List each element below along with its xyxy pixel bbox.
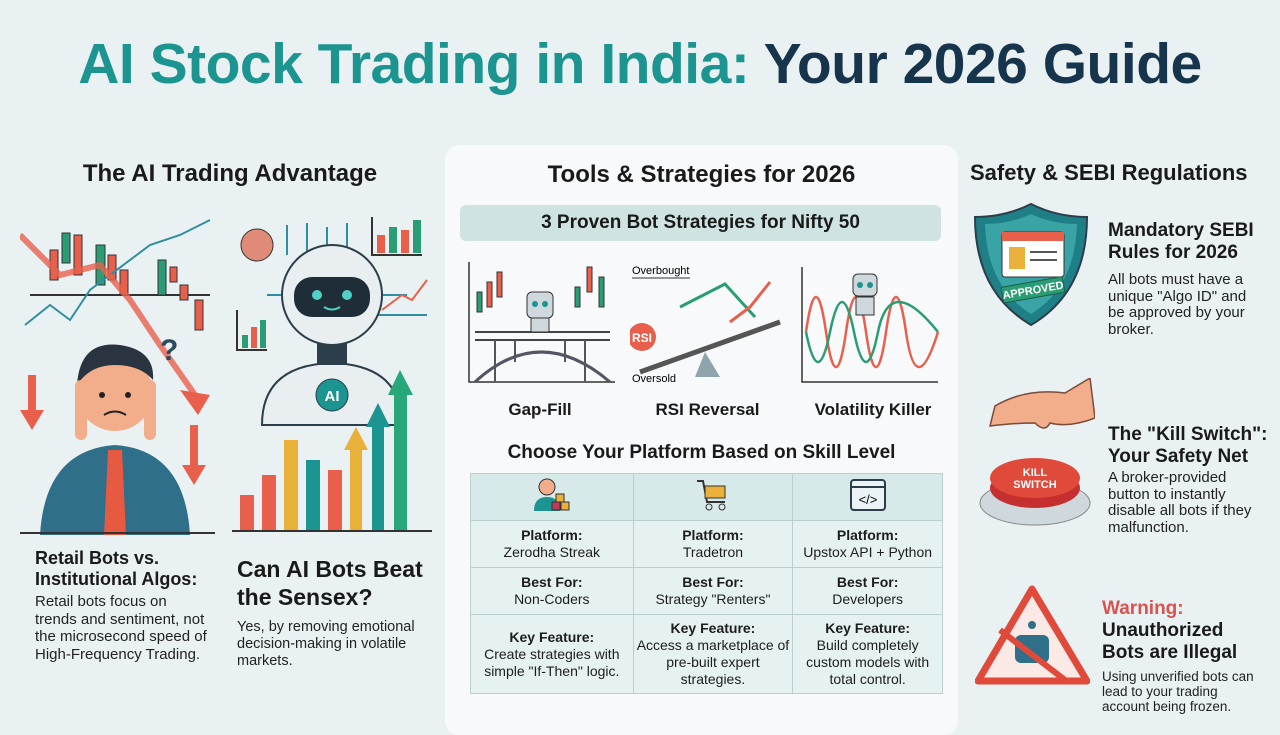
panel: tools & strategies: [445, 145, 958, 735]
panel: AI trading advantage: [20, 160, 432, 669]
text: retail bots: Retail Bots vs. Institutional Algos:: [35, 548, 197, 589]
illustration: stressed trader: [20, 219, 215, 535]
illustration: AI robot with rising bars: [232, 217, 432, 532]
strategy: RSI reversal: [630, 265, 781, 419]
strategy: volatility killer: [801, 267, 940, 419]
text: retail bots: Retail bots focus on trends and sentiment, not the microsecond speed of High-Frequency Trading.: [35, 593, 207, 662]
icon: shield approved: [974, 202, 1088, 326]
strategy: RSI reversal: Overbought: [632, 265, 689, 277]
strategy: gap-fill: [468, 262, 615, 419]
illustration: stressed trader: ?: [160, 334, 178, 367]
icon: code window: [850, 479, 886, 511]
icon: kill switch: [980, 378, 1095, 526]
table: platforms: Platform:: [837, 527, 898, 543]
icon: kill switch: SWITCH: [1013, 479, 1057, 491]
table: platforms: Best For:: [837, 574, 898, 590]
illustration: AI robot with rising bars: AI: [324, 388, 340, 405]
icon: code window: </>: [858, 492, 877, 507]
strategy: RSI reversal: RSI Reversal: [656, 400, 759, 419]
text: SEBI rules: Mandatory SEBI Rules for 2026: [1108, 220, 1254, 263]
table: platforms: Build completely custom models with total control.: [806, 637, 929, 687]
table: platforms: Best For:: [682, 574, 744, 590]
text: kill switch: A broker-provided button to instantly disable all bots if they malfunction.: [1108, 469, 1251, 536]
text: kill switch: The "Kill Switch": Your Safety Net: [1108, 424, 1267, 467]
banner: 3 strategies: 3 Proven Bot Strategies for Nifty 50: [541, 212, 860, 233]
table: platforms: Zerodha Streak: [504, 544, 600, 560]
table: platforms: Tradetron: [683, 544, 743, 560]
table: platforms: Create strategies with simple "If-Then" logic.: [484, 646, 620, 678]
text: warning: [1102, 598, 1254, 714]
table: platforms: Key Feature:: [825, 620, 910, 636]
strategy: RSI reversal: Oversold: [632, 373, 676, 385]
text: retail bots: [35, 548, 207, 662]
heading: tools: Tools & Strategies for 2026: [548, 161, 855, 188]
heading: advantage: The AI Trading Advantage: [83, 160, 377, 187]
banner: 3 strategies: [460, 205, 941, 241]
text: warning: Warning:: [1102, 598, 1184, 619]
text: warning: Using unverified bots can lead to your trading account being frozen.: [1102, 669, 1254, 714]
text: beat sensex: Can AI Bots Beat the Sensex?: [237, 556, 423, 610]
heading: choose platform: Choose Your Platform Based on Skill Level: [508, 442, 895, 463]
table: platforms: Access a marketplace of pre-built expert strategies.: [637, 637, 789, 687]
strategy: volatility killer: Volatility Killer: [815, 400, 931, 419]
table: platforms: Best For:: [521, 574, 583, 590]
text: SEBI rules: All bots must have a unique "Algo ID" and be approved by your broker.: [1108, 271, 1246, 338]
icon: shield approved: APPROVED: [1002, 280, 1065, 302]
text: warning: Unauthorized Bots are Illegal: [1102, 620, 1237, 663]
table: platforms: Strategy "Renters": [655, 591, 770, 607]
icon: kill switch: KILL: [1023, 467, 1047, 479]
text: SEBI rules: [1108, 220, 1254, 338]
table: platforms: Upstox API + Python: [803, 544, 932, 560]
table: platforms: Platform:: [682, 527, 744, 543]
icon: user: [534, 478, 570, 511]
title: AI Stock Trading in India: Your 2026 Guide: [78, 32, 1202, 96]
strategy: gap-fill: Gap-Fill: [508, 400, 572, 419]
table: platforms: Key Feature:: [509, 628, 594, 644]
panel: safety & SEBI: [970, 160, 1267, 714]
icon: warning no-bot: [975, 586, 1090, 684]
text: beat sensex: [237, 556, 423, 669]
strategy: RSI reversal: RSI: [632, 331, 652, 345]
table: platforms: Developers: [832, 591, 903, 607]
table: platforms: [470, 473, 943, 694]
heading: safety: Safety & SEBI Regulations: [970, 160, 1248, 185]
table: platforms: Key Feature:: [671, 620, 755, 636]
table: platforms: Non-Coders: [514, 591, 590, 607]
text: beat sensex: Yes, by removing emotional decision-making in volatile markets.: [237, 619, 415, 669]
text: kill switch: [1108, 424, 1267, 536]
icon: cart: [697, 480, 726, 510]
table: platforms: Platform:: [521, 527, 583, 543]
